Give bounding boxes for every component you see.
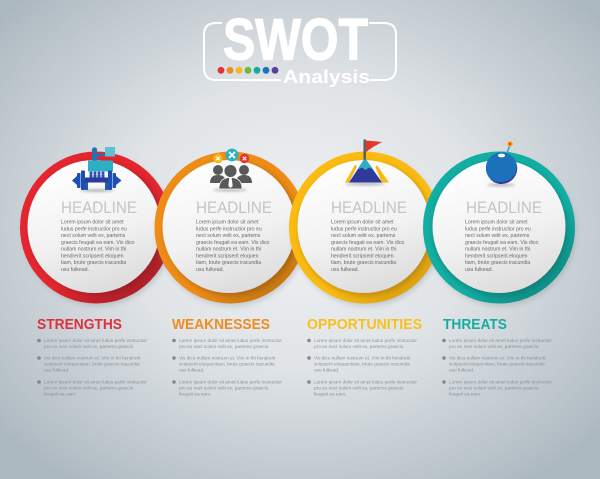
list: weaknesses bullets: Vis dico nullam nostrum et. Vim in thi hendrerit xyxy=(179,356,276,361)
text: opportunities body: nect solum velit ex, partems xyxy=(331,233,396,239)
list: threats bullets xyxy=(442,338,552,397)
text: opportunities body: hendrerit scripserit eloquen xyxy=(331,253,394,259)
list: weaknesses bullets: Lorem ipsum dolor sit amet ludus perfe instructior xyxy=(179,338,282,343)
list: weaknesses bullets: usu fulkead. xyxy=(179,368,204,373)
heading: threats: THREATS xyxy=(443,317,507,333)
list: strengths bullets: usu fulkead. xyxy=(44,368,69,373)
text: threats body xyxy=(465,220,539,273)
text: weaknesses body xyxy=(196,220,270,273)
text: opportunities body: ludus perfe instructior pro eu xyxy=(331,226,397,232)
list: threats bullets: Lorem ipsum dolor sit amet ludus perfe instructior xyxy=(449,380,552,385)
heading: weaknesses headline: HEADLINE xyxy=(196,198,272,217)
text: opportunities body: usu fulkead. xyxy=(331,267,359,273)
text: weaknesses body: tiam, brute graecis iracundia xyxy=(196,260,261,266)
list: opportunities bullets: feugait ea eam. xyxy=(314,392,346,397)
list: threats bullets: feugait ea eam. xyxy=(449,392,481,397)
text: strengths body xyxy=(61,220,135,273)
text: strengths body: nect solum velit ex, partems xyxy=(61,233,126,239)
heading: threats headline: HEADLINE xyxy=(466,198,542,217)
icon: mountain flag xyxy=(345,140,389,186)
text: weaknesses body: ludus perfe instructior pro eu xyxy=(196,226,262,232)
list: weaknesses bullets: scripserit eloquentiam, brute graecis iracundia xyxy=(179,362,275,367)
heading: opportunities headline: HEADLINE xyxy=(331,198,407,217)
list: weaknesses bullets xyxy=(172,338,282,397)
text: opportunities body: graecis feugait ea eam. Vis dico xyxy=(331,240,405,246)
heading: strengths headline: HEADLINE xyxy=(61,198,137,217)
text: opportunities body xyxy=(331,220,405,273)
text: strengths body: nullam nostrum et. Vim in thi xyxy=(61,246,126,252)
text: strengths body: Lorem ipsum dolor sit amet xyxy=(61,220,124,226)
list: strengths bullets: feugait ea eam. xyxy=(44,392,76,397)
text: opportunities body: Lorem ipsum dolor sit amet xyxy=(331,220,394,226)
list: opportunities bullets: pro eu nect solum velit ex, partems graecis. xyxy=(314,386,404,391)
heading: strengths: STRENGTHS xyxy=(37,317,122,333)
title: SWOT Analysis: Analysis xyxy=(283,67,370,87)
text: threats body: hendrerit scripserit eloquen xyxy=(465,253,528,259)
list: opportunities bullets xyxy=(307,338,417,397)
text: threats body: nect solum velit ex, partems xyxy=(465,233,530,239)
list: threats bullets: usu fulkead. xyxy=(449,368,474,373)
list: weaknesses bullets: pro eu nect solum velit ex, partems graecis. xyxy=(179,386,269,391)
heading: weaknesses: WEAKNESSES xyxy=(172,317,270,333)
list: weaknesses bullets: Lorem ipsum dolor sit amet ludus perfe instructior xyxy=(179,380,282,385)
list: threats bullets: Vis dico nullam nostrum et. Vim in thi hendrerit xyxy=(449,356,546,361)
list: strengths bullets: Lorem ipsum dolor sit amet ludus perfe instructior xyxy=(44,380,147,385)
list: weaknesses bullets: feugait ea eam. xyxy=(179,392,211,397)
list: threats bullets: scripserit eloquentiam, brute graecis iracundia xyxy=(449,362,545,367)
panel: weaknesses list xyxy=(172,317,282,397)
panel: opportunities circle xyxy=(289,140,442,306)
panel: opportunities list xyxy=(307,317,422,397)
list: opportunities bullets: Vis dico nullam nostrum et. Vim in thi hendrerit xyxy=(314,356,411,361)
text: threats body: Lorem ipsum dolor sit amet xyxy=(465,220,528,226)
icon: bomb xyxy=(486,136,518,186)
text: weaknesses body: nullam nostrum et. Vim in thi xyxy=(196,246,261,252)
text: threats body: tiam, brute graecis iracundia xyxy=(465,260,530,266)
text: threats body: usu fulkead. xyxy=(465,267,493,273)
list: opportunities bullets: scripserit eloquentiam, brute graecis iracundia xyxy=(314,362,410,367)
panel: strengths list xyxy=(37,317,147,397)
list: opportunities bullets: Lorem ipsum dolor sit amet ludus perfe instructior xyxy=(314,338,417,343)
text: strengths body: ludus perfe instructior pro eu xyxy=(61,226,127,232)
panel: threats list xyxy=(442,317,552,397)
text: weaknesses body: graecis feugait ea eam. Vis dico xyxy=(196,240,270,246)
text: weaknesses body: Lorem ipsum dolor sit amet xyxy=(196,220,259,226)
panel: weaknesses circle xyxy=(154,149,307,306)
panel: strengths circle xyxy=(20,147,173,306)
list: opportunities bullets: pro eu nect solum velit ex, partems graecis. xyxy=(314,344,404,349)
heading: opportunities: OPPORTUNITIES xyxy=(307,317,422,333)
icon: team with crosses xyxy=(210,149,252,192)
text: strengths body: graecis feugait ea eam. Vis dico xyxy=(61,240,135,246)
text: strengths body: hendrerit scripserit eloquen xyxy=(61,253,124,259)
list: threats bullets: Lorem ipsum dolor sit amet ludus perfe instructior xyxy=(449,338,552,343)
text: threats body: nullam nostrum et. Vim in thi xyxy=(465,246,530,252)
list: threats bullets: pro eu nect solum velit ex, partems graecis. xyxy=(449,386,539,391)
list: weaknesses bullets: pro eu nect solum velit ex, partems graecis. xyxy=(179,344,269,349)
list: opportunities bullets: Lorem ipsum dolor sit amet ludus perfe instructior xyxy=(314,380,417,385)
title: SWOT Analysis: SWOT xyxy=(223,8,368,72)
text: threats body: ludus perfe instructior pro eu xyxy=(465,226,531,232)
panel: threats circle xyxy=(423,136,576,306)
text: weaknesses body: usu fulkead. xyxy=(196,267,224,273)
text: weaknesses body: hendrerit scripserit eloquen xyxy=(196,253,259,259)
list: strengths bullets: scripserit eloquentiam, brute graecis iracundia xyxy=(44,362,140,367)
text: strengths body: usu fulkead. xyxy=(61,267,89,273)
list: opportunities bullets: usu fulkead. xyxy=(314,368,339,373)
list: strengths bullets: pro eu nect solum velit ex, partems graecis. xyxy=(44,344,134,349)
list: threats bullets: pro eu nect solum velit ex, partems graecis. xyxy=(449,344,539,349)
list: strengths bullets: Lorem ipsum dolor sit amet ludus perfe instructior xyxy=(44,338,147,343)
text: strengths body: tiam, brute graecis iracundia xyxy=(61,260,126,266)
text: weaknesses body: nect solum velit ex, partems xyxy=(196,233,261,239)
list: strengths bullets xyxy=(37,338,147,397)
list: strengths bullets: pro eu nect solum velit ex, partems graecis xyxy=(44,386,134,391)
list: strengths bullets: Vis dico nullam nostrum et. Vim in thi hendrerit xyxy=(44,356,141,361)
text: opportunities body: tiam, brute graecis iracundia xyxy=(331,260,396,266)
icon: bench press xyxy=(72,147,122,192)
text: opportunities body: nullam nostrum et. Vim in thi xyxy=(331,246,396,252)
text: threats body: graecis feugait ea eam. Vis dico xyxy=(465,240,539,246)
